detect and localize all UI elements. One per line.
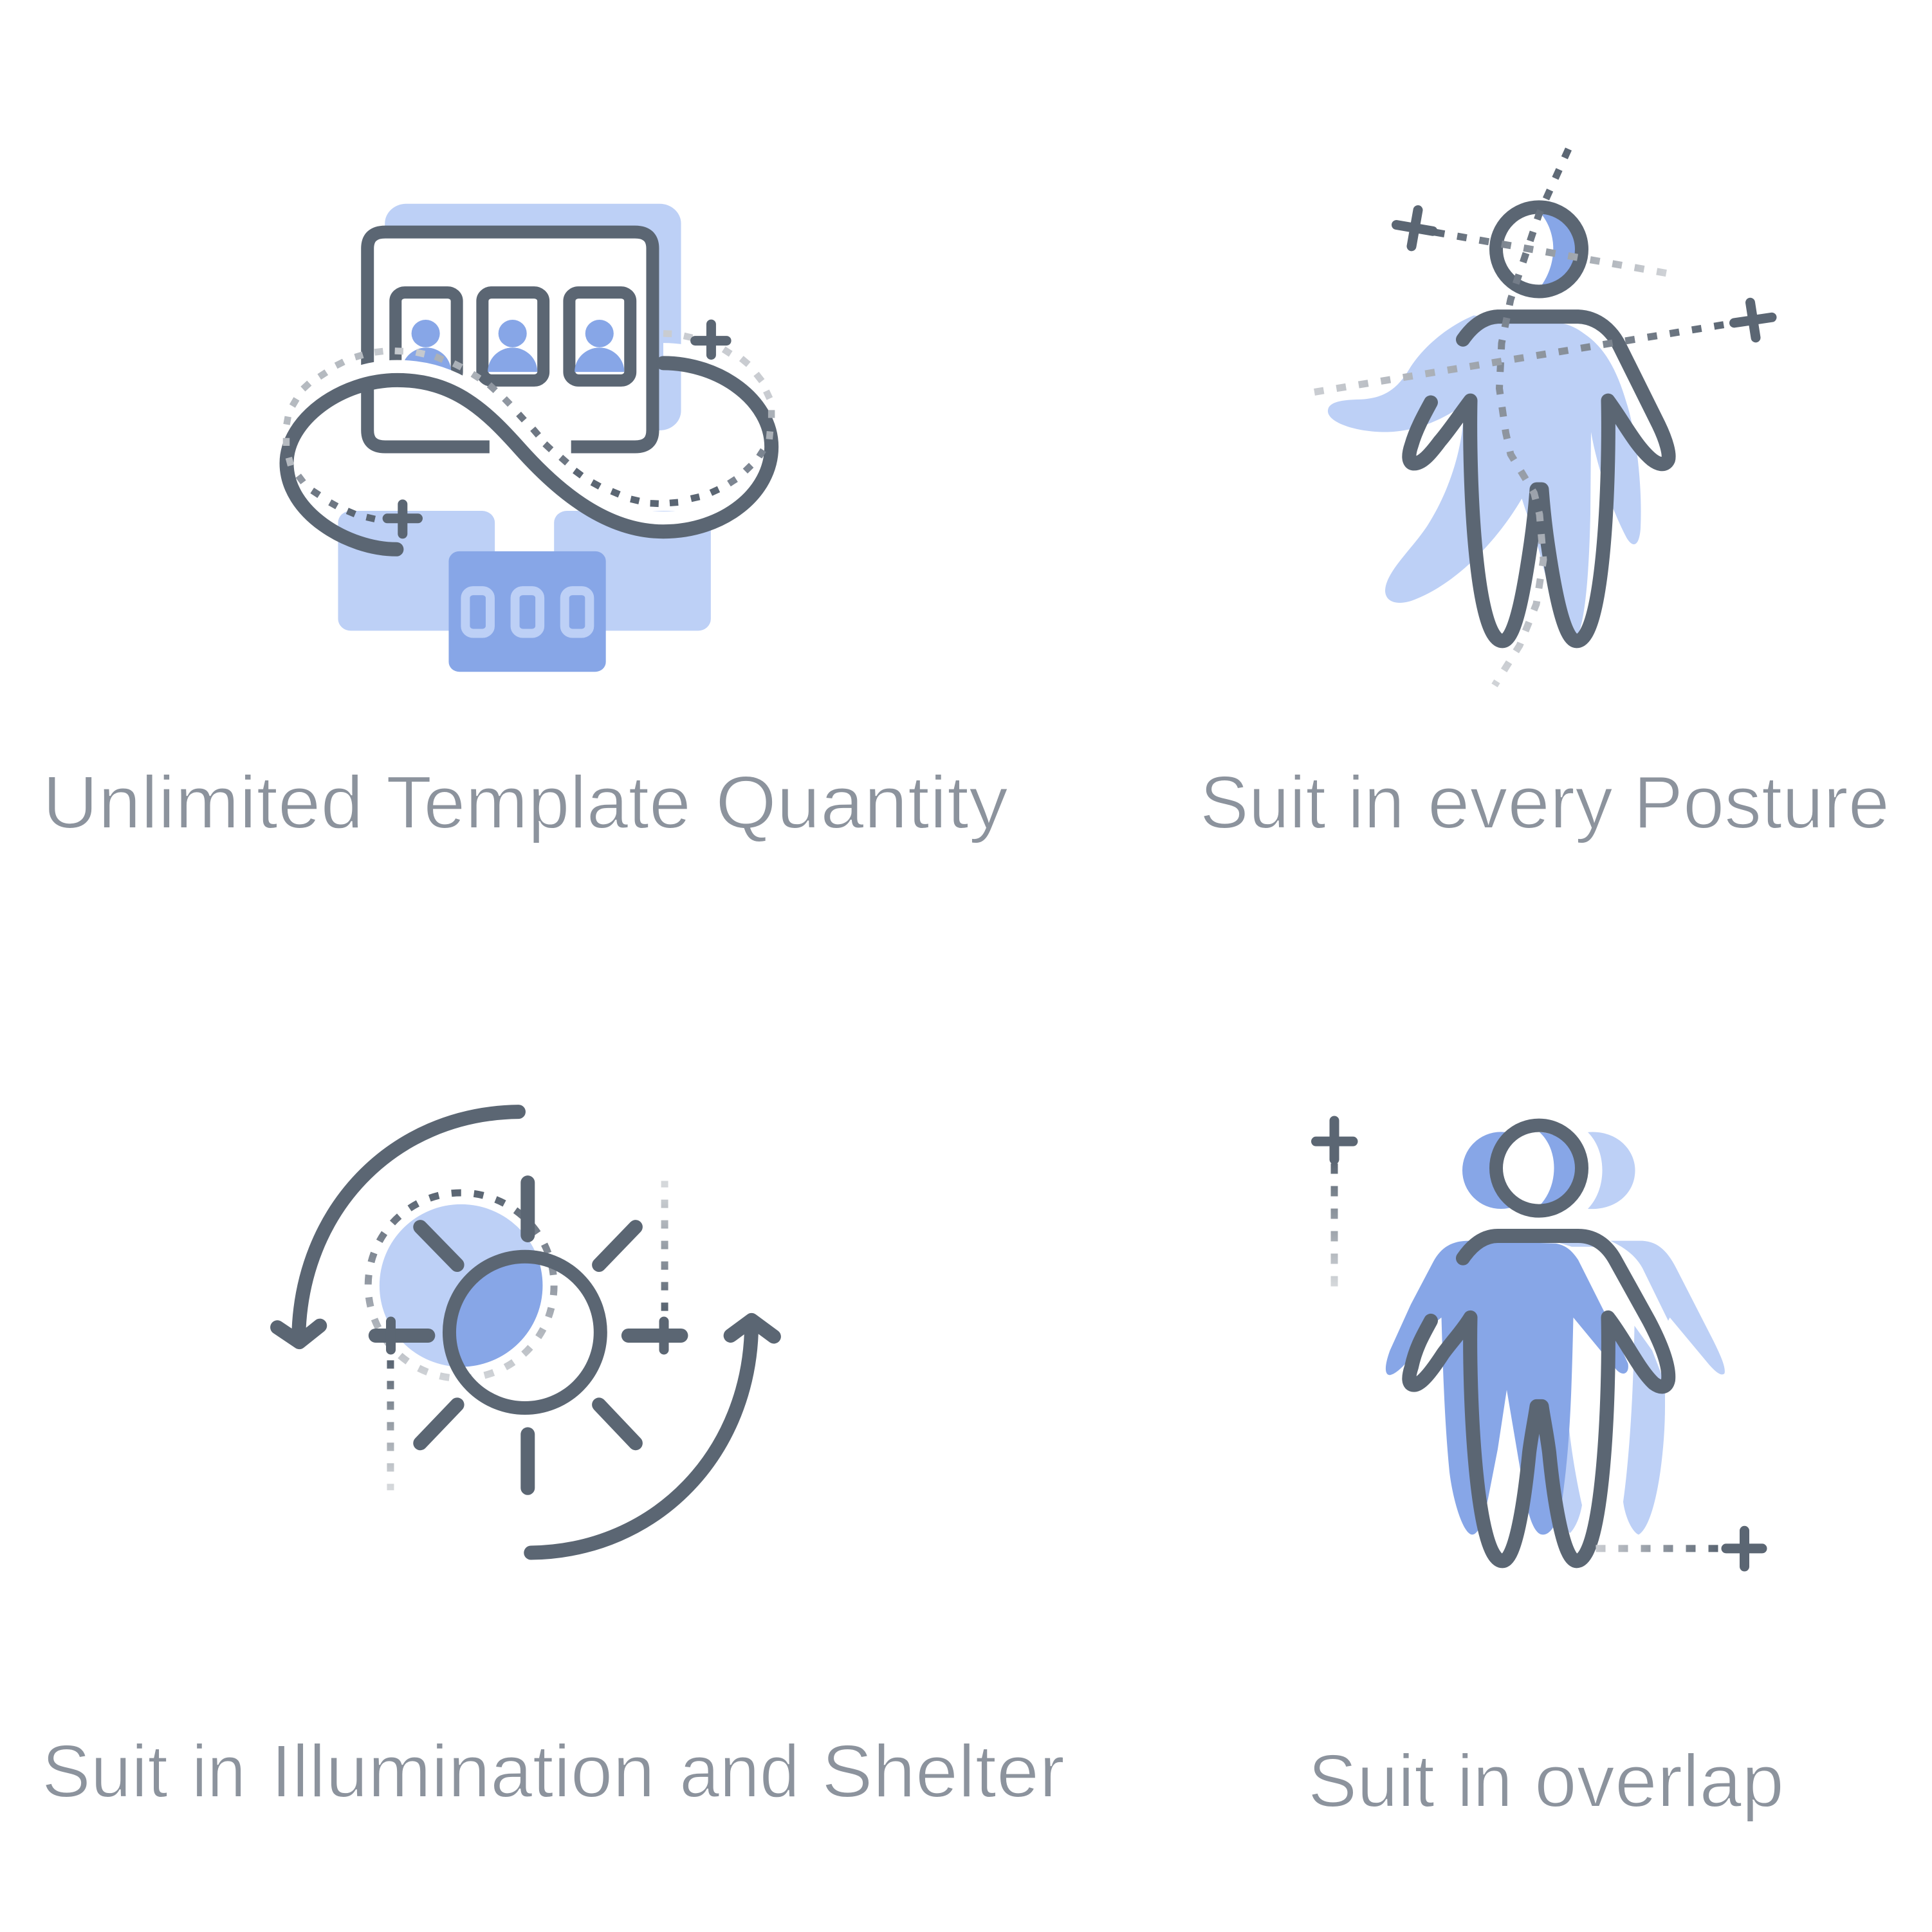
dashed guide left <box>387 1360 394 1490</box>
dashed guide through shoulders <box>1314 323 1733 392</box>
overlap of disc and sun <box>455 1264 543 1366</box>
figure outline <box>1409 1236 1668 1561</box>
rear figure light <box>1556 1132 1725 1534</box>
caption: unlimited template quantity <box>42 760 1008 844</box>
cape silhouette <box>1328 315 1641 638</box>
caption: suit in overlap: overlap <box>1534 1739 1784 1823</box>
caption: unlimited template quantity: Template <box>386 760 691 844</box>
head outline <box>1496 207 1581 291</box>
caption: suit in illumination and shelter: and <box>679 1729 800 1813</box>
lower left folder <box>338 511 495 630</box>
infinity loop <box>287 363 771 549</box>
plus marks <box>387 324 726 534</box>
front card with three slots <box>448 551 606 672</box>
portrait thumbnails <box>396 293 630 380</box>
head fill <box>1541 214 1576 286</box>
caption: suit in illumination and shelter: in <box>192 1729 246 1813</box>
caption: unlimited template quantity: Quantity <box>715 760 1008 844</box>
back card <box>385 204 681 430</box>
head crescent <box>1540 1132 1576 1206</box>
caption: suit in overlap: Suit <box>1308 1739 1435 1823</box>
caption: suit in every posture: Posture <box>1633 760 1890 844</box>
plus marks <box>391 1321 664 1350</box>
caption: suit in every posture: Suit <box>1200 760 1326 844</box>
rotation arrow top left <box>277 1112 519 1342</box>
dashed guide horizontal <box>1596 1545 1718 1552</box>
dotted infinity guide <box>286 333 771 519</box>
caption: suit in illumination and shelter: Shelter <box>822 1729 1065 1813</box>
caption: suit in overlap: in <box>1457 1739 1513 1823</box>
template frame <box>367 232 652 447</box>
dashed guide through body <box>1495 149 1569 685</box>
caption: suit in illumination and shelter <box>42 1729 1065 1813</box>
sun rays <box>376 1182 681 1488</box>
icon: illumination and shelter <box>277 1112 774 1553</box>
lower right folder <box>554 511 711 630</box>
sun ring <box>449 1256 600 1408</box>
dashed guide vertical <box>1330 1163 1338 1288</box>
caption: suit in every posture: in <box>1348 760 1404 844</box>
caption: unlimited template quantity: Unlimited <box>42 760 363 844</box>
plus marks <box>1316 1121 1762 1567</box>
figure outline <box>1409 317 1669 641</box>
caption: suit in illumination and shelter: Suit <box>42 1729 168 1813</box>
dotted orbit <box>368 1193 554 1378</box>
plus marks <box>1396 210 1772 338</box>
icon: suit in every posture <box>1314 149 1772 685</box>
caption: suit in illumination and shelter: Illumination <box>271 1729 655 1813</box>
infinity halo <box>287 356 771 524</box>
middle figure <box>1386 1132 1628 1534</box>
head interior <box>1496 1125 1581 1211</box>
icon: unlimited template quantity <box>286 204 771 672</box>
caption: suit in every posture: every <box>1428 760 1613 844</box>
caption: suit in every posture <box>1200 760 1890 844</box>
caption: suit in overlap <box>1308 1739 1784 1823</box>
head outline <box>1496 1125 1581 1211</box>
icon: suit in overlap <box>1316 1121 1762 1567</box>
rotation arrow bottom right <box>531 1320 774 1553</box>
sun interior <box>449 1256 600 1408</box>
dashed guide through head <box>1435 232 1671 274</box>
dashed guide right <box>661 1181 668 1311</box>
shadow disc <box>380 1204 542 1367</box>
template frame interior <box>367 232 652 447</box>
